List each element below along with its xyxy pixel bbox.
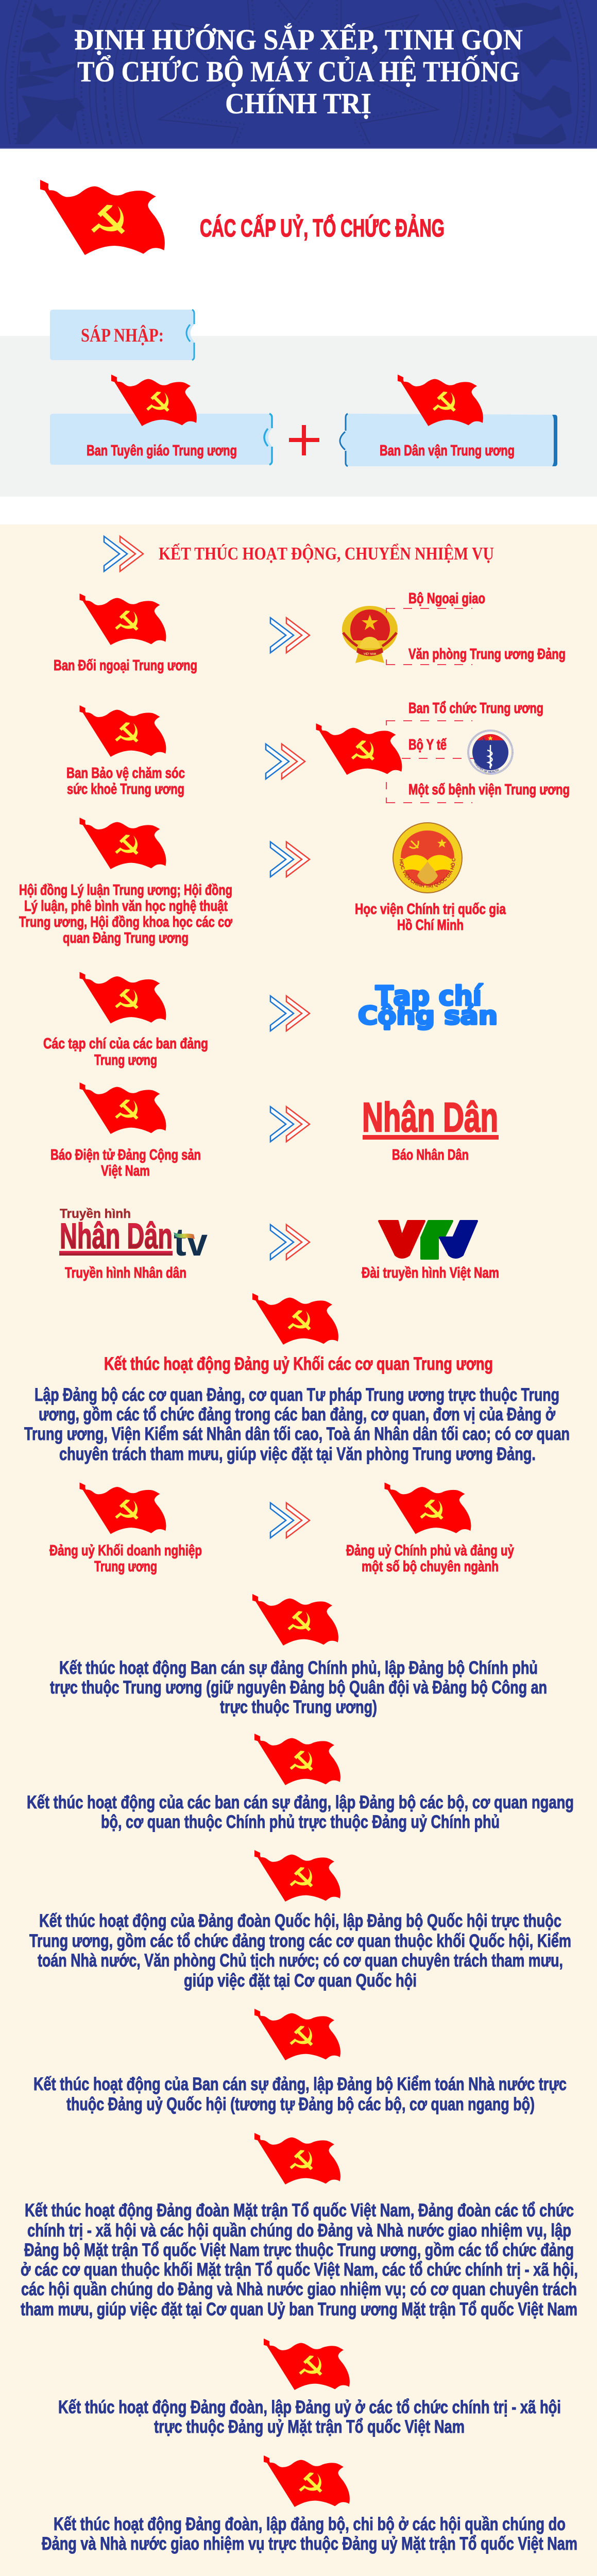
row: Truyền hình Nhân dân: [59, 1207, 499, 1281]
icon: national emblem: [342, 606, 398, 663]
row: Tạp chí: [43, 972, 498, 1069]
panel: Ban Dân vận Trung ương: [340, 375, 557, 466]
row: Ban Đối ngoại: Bộ Ngoại giao: [408, 590, 485, 607]
block: Đảng đoàn Quốc hội: giúp việc đặt tại Cơ quan Quốc hội: [184, 1971, 417, 1991]
block: Ban cán sự đảng Chính phủ: [50, 1594, 547, 1717]
row: Hội đồng Lý luận: Hội đồng Lý luận Trung ương; Hội đồng: [19, 882, 232, 899]
row: Ban Đối ngoại: [54, 590, 566, 674]
row: Hội đồng Lý luận: Trung ương, Hội đồng khoa học các cơ: [19, 914, 233, 930]
row: Đảng uỷ Khối doanh nghiệp: một số bộ chuyên ngành: [362, 1558, 499, 1575]
panel: Ban Tuyên giáo Trung ương: [50, 375, 272, 465]
row: Tạp chí: Trung ương: [94, 1052, 157, 1069]
block: Ban cán sự đảng Chính phủ: trực thuộc Trung ương): [220, 1697, 377, 1717]
header banner: [0, 0, 597, 149]
title: [74, 23, 523, 120]
logo: Nhân Dân TV: Nhân Dân: [60, 1216, 173, 1256]
block: Đảng uỷ Khối các cơ quan Trung ương: [24, 1293, 570, 1464]
row: Đảng uỷ Khối doanh nghiệp: [49, 1483, 514, 1575]
icon: Ministry of Health logo: [467, 730, 514, 775]
logo: Tạp chí Cộng sản: Cộng sản: [358, 1002, 498, 1030]
panel: merge label: SÁP NHẬP:: [81, 325, 164, 346]
logo: Tạp chí Cộng sản: Tạp chí: [376, 981, 483, 1012]
row: Ban Bảo vệ chăm sóc sức khoẻ: [66, 700, 570, 803]
title: ĐỊNH HƯỚNG SẮP XẾP, TINH GỌN: [74, 23, 523, 56]
block: Mặt trận Tổ quốc Việt Nam: [21, 2133, 578, 2319]
row: Báo Điện tử: [50, 1082, 499, 1179]
logo: Nhân Dân TV: [59, 1207, 208, 1264]
row: Ban Bảo vệ chăm sóc sức khoẻ: Bộ Y tế: [408, 737, 447, 753]
block: tổ chức chính trị - xã hội: [58, 2338, 561, 2437]
panel: Ban Dân vận Trung ương: Ban Dân vận Trung ương: [380, 443, 515, 459]
block: tổ chức chính trị - xã hội: trực thuộc Đảng uỷ Mặt trận Tổ quốc Việt Nam: [154, 2417, 465, 2437]
row: Báo Điện tử: Báo Điện tử Đảng Cộng sản: [50, 1147, 201, 1163]
block: các ban cán sự đảng: [27, 1734, 574, 1832]
row: Truyền hình Nhân dân: Đài truyền hình Việt Nam: [362, 1265, 499, 1281]
icon: Ho Chi Minh academy logo: HỌC VIỆN CHÍNH TRỊ QUỐC GIA HỒ CHÍ MINH: [399, 858, 455, 888]
icon: Ho Chi Minh academy logo: [393, 822, 463, 893]
panel: merge label: [50, 310, 194, 360]
row: Truyền hình Nhân dân: Truyền hình Nhân dân: [65, 1265, 186, 1281]
heading: end of activities: KẾT THÚC HOẠT ĐỘNG, CHUYỂN NHIỆM VỤ: [159, 543, 494, 564]
logo: Nhân Dân: Nhân Dân: [362, 1094, 498, 1140]
icon: Ministry of Health logo: MINISTRY OF HEALTH: [474, 761, 499, 773]
plus sign: [289, 425, 319, 455]
block: Đảng uỷ Khối các cơ quan Trung ương: Kết thúc hoạt động Đảng uỷ Khối các cơ quan Trung ương: [104, 1354, 493, 1374]
title: CHÍNH TRỊ: [225, 88, 371, 120]
row: Hội đồng Lý luận: Lý luận, phê bình văn học nghệ thuật: [24, 898, 228, 914]
title: TỔ CHỨC BỘ MÁY CỦA HỆ THỐNG: [77, 55, 520, 88]
icon: Ministry of Health logo: BỘ Y TẾ: [480, 737, 486, 740]
row: Hội đồng Lý luận: Học viện Chính trị quốc gia: [355, 901, 506, 918]
row: Ban Đối ngoại: Ban Đối ngoại Trung ương: [54, 657, 197, 674]
panel: party committees heading: [40, 180, 445, 255]
row: Ban Bảo vệ chăm sóc sức khoẻ: sức khoẻ Trung ương: [67, 781, 184, 798]
header animal silhouettes: [16, 3, 572, 144]
logo: Nhân Dân TV: Truyền hình: [60, 1207, 131, 1221]
row: Báo Điện tử: Báo Nhân Dân: [392, 1147, 469, 1163]
panel: party committees heading: CÁC CẤP UỶ, TỔ CHỨC ĐẢNG: [200, 214, 445, 242]
row: Hội đồng Lý luận: Hồ Chí Minh: [397, 917, 464, 934]
row: Đảng uỷ Khối doanh nghiệp: Đảng uỷ Khối doanh nghiệp: [49, 1543, 202, 1559]
row: Hội đồng Lý luận: [19, 818, 506, 946]
block: hội quần chúng: [42, 2455, 577, 2554]
row: Đảng uỷ Khối doanh nghiệp: Đảng uỷ Chính phủ và đảng uỷ: [346, 1543, 514, 1559]
row: Tạp chí: Các tạp chí của các ban đảng: [43, 1036, 208, 1052]
panel: Ban Tuyên giáo Trung ương: Ban Tuyên giáo Trung ương: [87, 443, 237, 459]
row: Đảng uỷ Khối doanh nghiệp: Trung ương: [94, 1558, 157, 1575]
logo: Tạp chí Cộng sản: [358, 981, 498, 1030]
row: Hội đồng Lý luận: quan Đảng Trung ương: [63, 930, 189, 946]
row: Ban Bảo vệ chăm sóc sức khoẻ: Ban Tổ chức Trung ương: [408, 700, 543, 717]
logo: VTV: [379, 1221, 477, 1259]
block: Đảng đoàn Quốc hội: [29, 1850, 571, 1991]
block: Kiểm toán Nhà nước: [33, 2009, 567, 2114]
row: Báo Điện tử: Việt Nam: [101, 1163, 150, 1179]
row: Ban Bảo vệ chăm sóc sức khoẻ: Ban Bảo vệ chăm sóc: [66, 765, 185, 782]
logo: Nhân Dân TV: tv: [174, 1221, 208, 1264]
heading: end of activities: [104, 536, 494, 571]
icon: national emblem: VIỆT NAM: [364, 652, 376, 656]
